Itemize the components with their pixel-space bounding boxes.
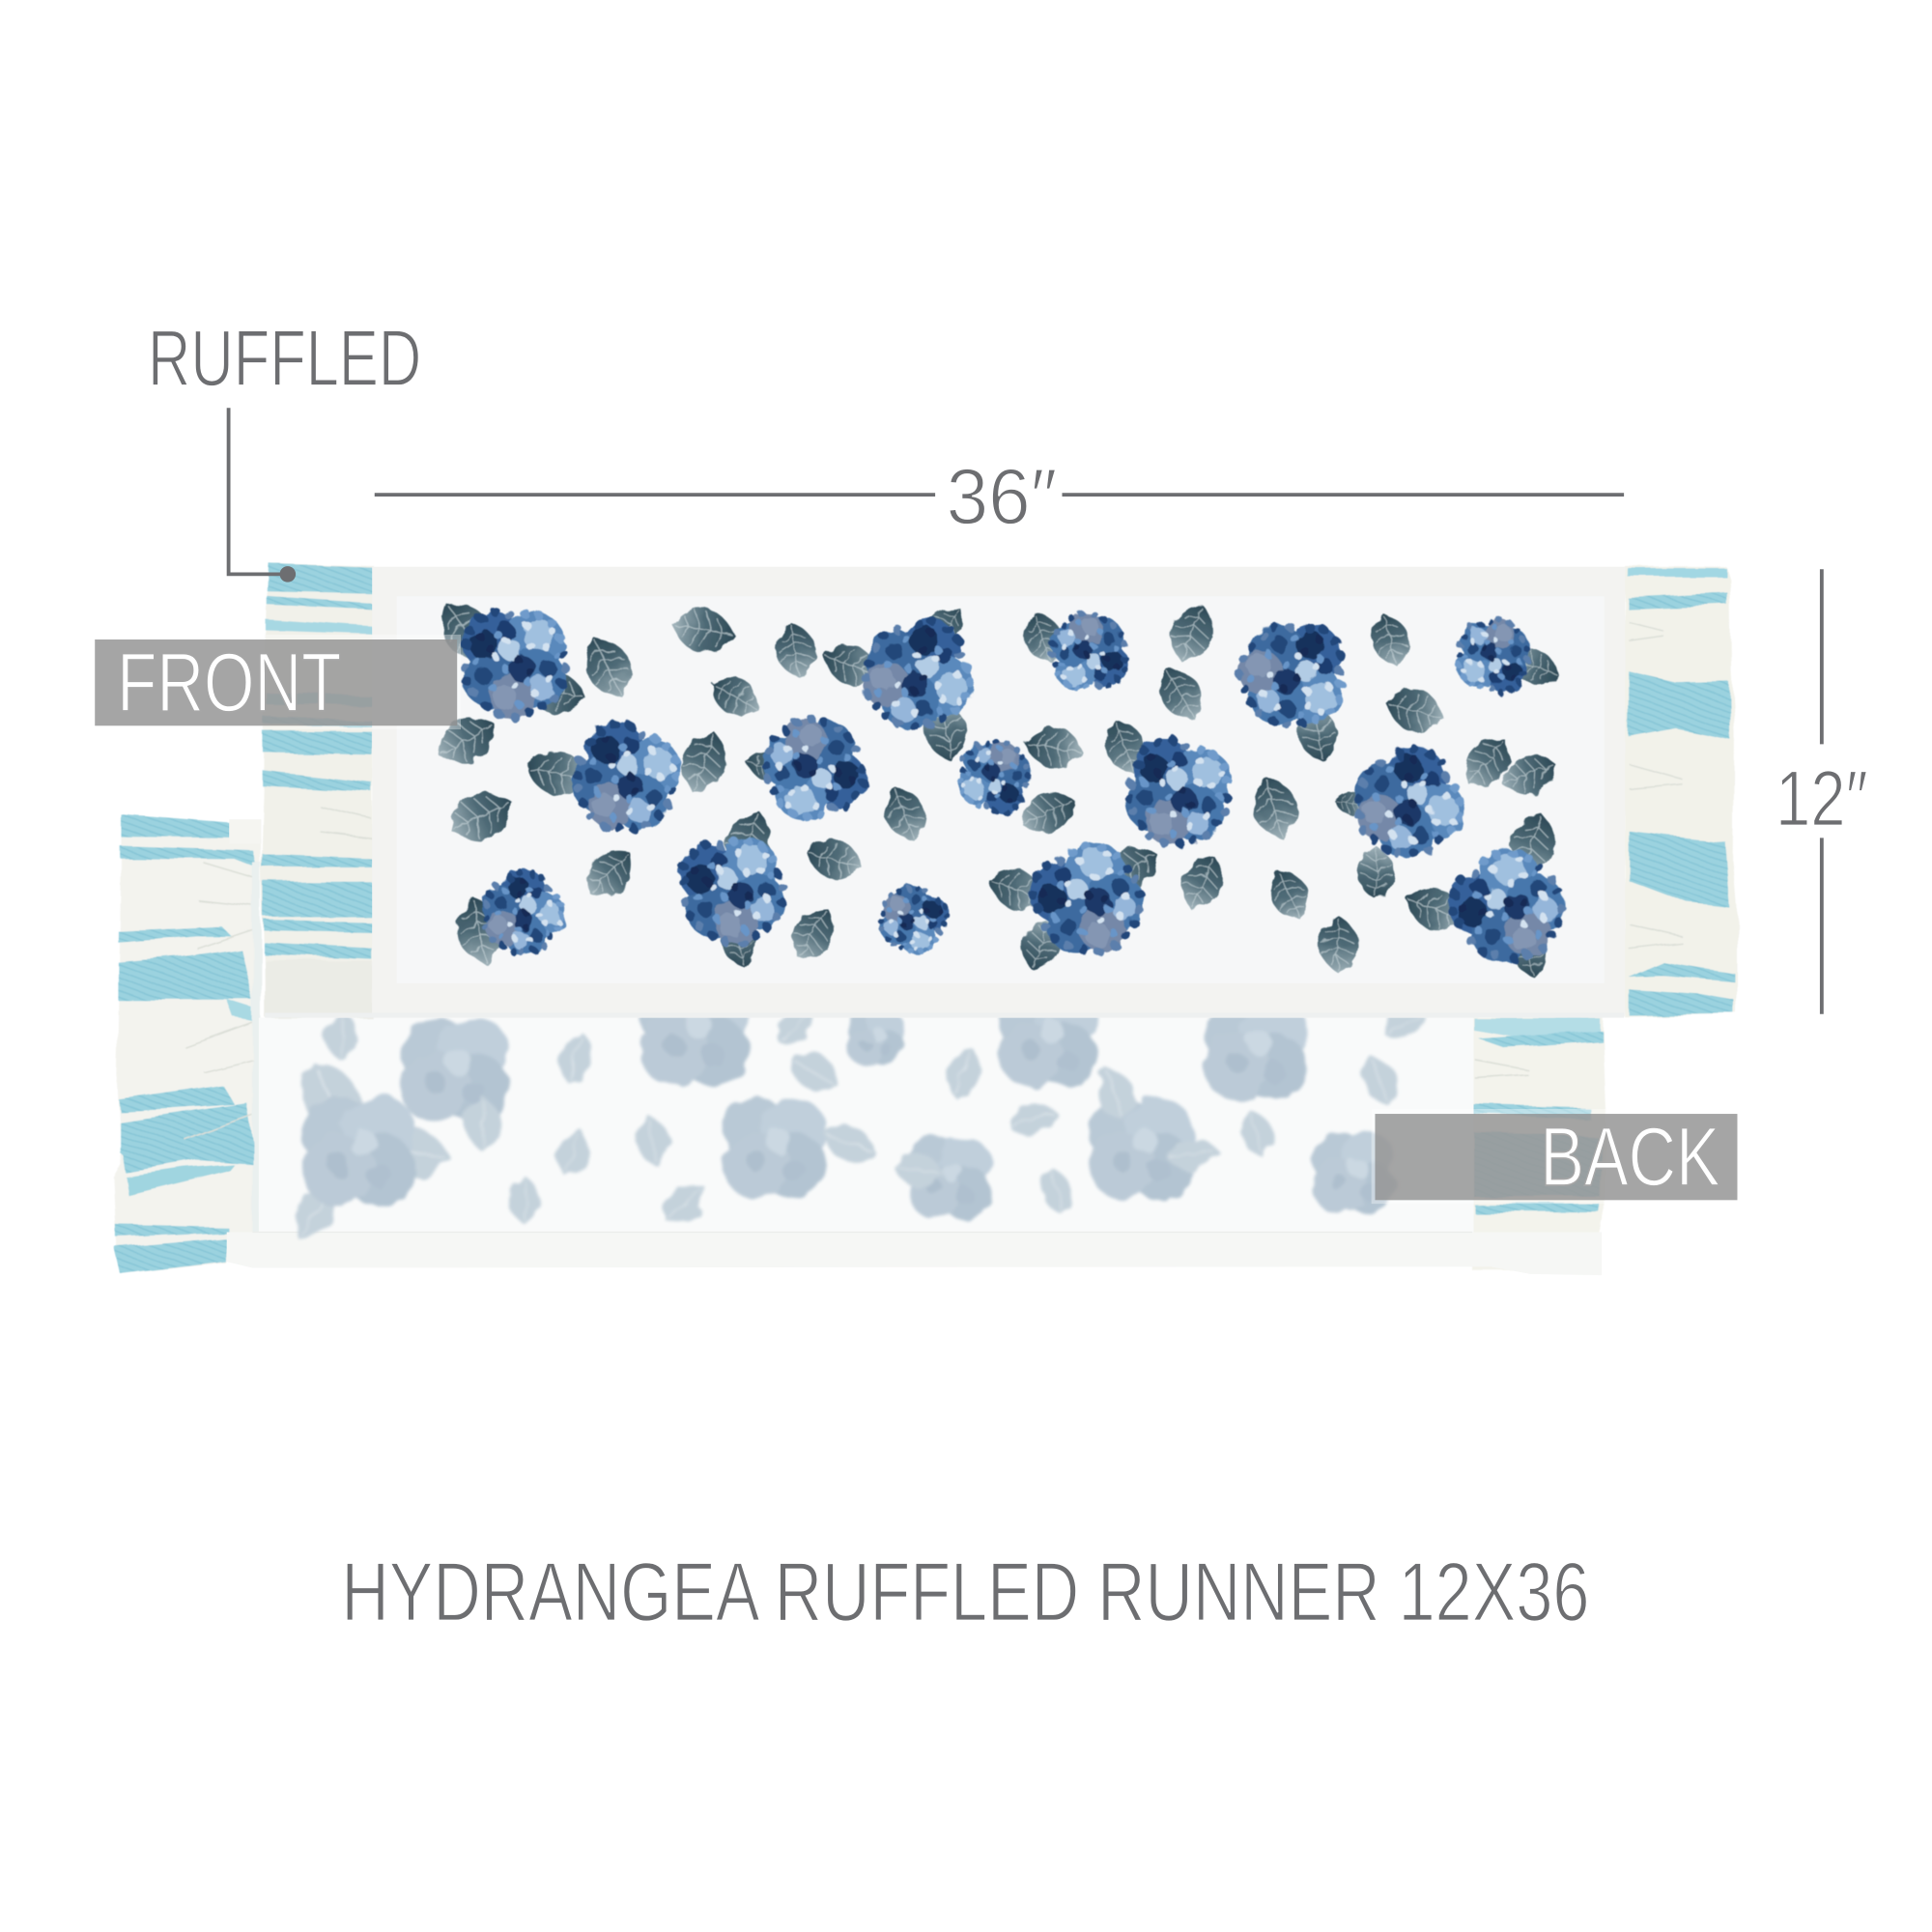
dimension label: 12 inches: 12″ bbox=[1776, 755, 1868, 843]
front panel bbox=[265, 567, 1625, 1018]
dimension line: width bbox=[375, 494, 1624, 497]
front ruffle: right bbox=[1624, 565, 1737, 1016]
label box: front: FRONT bbox=[117, 636, 341, 729]
back panel bbox=[227, 819, 1602, 1275]
front runner bbox=[261, 563, 1737, 1018]
callout line: ruffled bbox=[229, 408, 296, 582]
label box: back bbox=[1372, 1109, 1741, 1204]
dimension label: 36 inches: 36″ bbox=[947, 453, 1057, 541]
label box: back: BACK bbox=[1540, 1110, 1720, 1204]
dimension line: height bbox=[1820, 569, 1823, 1014]
back print showing through bbox=[294, 1018, 1427, 1240]
front print: hydrangeas bbox=[460, 604, 1589, 987]
title: HYDRANGEA RUFFLED RUNNER 12X36 bbox=[341, 1545, 1589, 1638]
label: ruffled: RUFFLED bbox=[148, 313, 421, 403]
back ruffle: right bbox=[1471, 1016, 1605, 1269]
front print: leaves bbox=[428, 590, 1564, 980]
front ruffle: left bbox=[261, 563, 373, 1018]
back runner bbox=[113, 814, 1605, 1275]
back ruffle: left bbox=[113, 814, 261, 1274]
